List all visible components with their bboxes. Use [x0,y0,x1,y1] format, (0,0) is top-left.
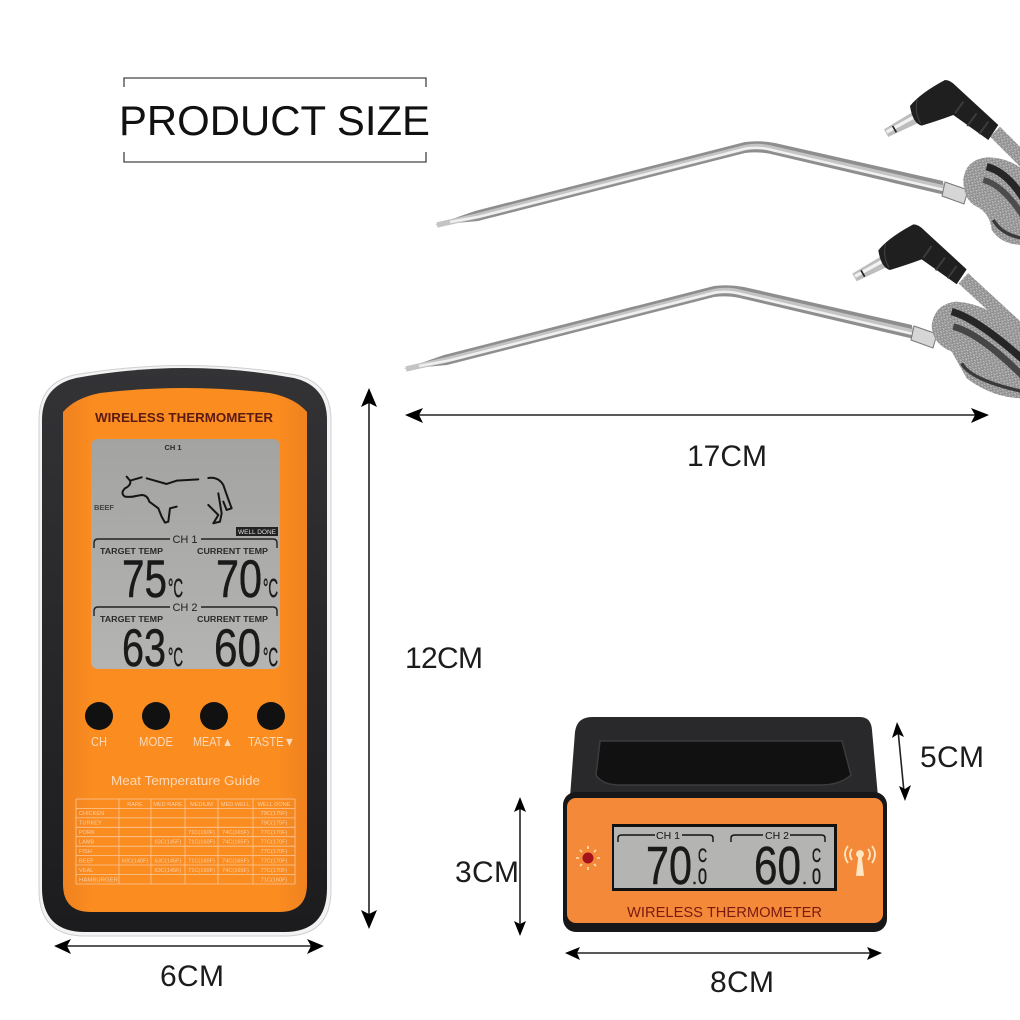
meat temperature table: 71C(160F) [188,830,215,836]
meat temperature table: 74C(165F) [222,830,249,836]
icon: red led [576,846,600,870]
button labels: MEAT▲ [193,735,233,749]
meat temperature table: MED RARE [153,802,183,808]
arrow: 12cm [361,388,377,929]
meat temperature table: 77C(170F) [261,830,287,836]
meat temperature table: 63C(145F) [155,840,181,846]
label: 3cm: 3CM [455,856,519,889]
channel 1 readout: °C [168,573,183,603]
channel 1 display: 70 [646,836,692,896]
probe 2 needle [404,285,937,369]
device body [42,368,327,932]
meat temperature table: PORK [79,830,95,836]
channel 1 readout: CURRENT TEMP [197,547,269,556]
channel 2 readout: CH 2 [172,602,198,614]
icon: jack 1 [884,80,998,140]
meat temperature table: 79C(175F) [261,820,287,826]
meat temperature table: 63C(145F) [155,868,181,874]
arrow: 3cm [514,797,526,936]
channel 1 display [618,830,713,896]
cable 2 lead [963,278,1020,337]
channel 1 readout: 70 [216,550,262,609]
channel 2 readout: TARGET TEMP [100,615,164,624]
channel 2 readout: °C [263,642,278,672]
channel 2 display [731,830,825,896]
meat temperature table: HAMBURGER [79,878,118,884]
arrow: 6cm [54,939,324,954]
meat temperature table: 77C(170F) [261,840,287,846]
channel 1 readout: CH 1 [172,534,198,546]
channel 2 readout: 60 [214,619,261,678]
label: 5cm: 5CM [920,741,984,774]
meat temperature table: 74C(165F) [222,858,249,864]
meat temperature table: 63C(145F) [155,858,181,864]
channel 2 display: 0 [812,864,821,889]
channel 1 readout: 75 [122,550,167,609]
channel 2 readout: CURRENT TEMP [197,615,269,624]
meat temperature table: MEDIUM [190,802,213,808]
channel 2 readout [94,602,278,678]
icon: jack 2 [852,224,967,284]
channel 1 readout: TARGET TEMP [100,547,164,556]
label: 8cm: 8CM [710,966,774,999]
icon: cow [122,477,232,523]
meat temperature table: 71C(160F) [261,878,287,884]
meat temperature table: 74C(165F) [222,868,249,874]
channel 2 readout: 63 [122,619,166,678]
meat temperature table: 71C(160F) [188,868,215,874]
meat temperature table: LAMB [79,840,95,846]
channel 2 readout: °C [168,642,183,672]
device heading: WIRELESS THERMOMETER [95,411,273,425]
cable coil 2 [932,302,1020,398]
meat temperature table: 77C(170F) [261,849,287,855]
channel 2 display: C [812,846,821,867]
channel 1 readout: °C [263,573,278,603]
channel 1 display: C [698,846,707,867]
lcd beef label: BEEF [94,503,114,512]
device outline [39,366,331,936]
channel 2 display: 60 [754,836,801,896]
meat temperature table: TURKEY [79,820,102,826]
button labels: TASTE▼ [248,735,295,749]
rear stand [570,717,878,797]
handheld receiver [39,366,331,936]
title: product size [119,78,430,162]
guide heading: Meat Temperature Guide [111,773,260,788]
stand slot [596,741,851,785]
icon: antenna signal [845,846,875,875]
probe 1 needle [435,141,968,225]
front heading: WIRELESS THERMOMETER [627,905,822,921]
orange front [567,798,883,923]
label: 6cm: 6CM [160,960,224,993]
probe cables and jacks [852,80,1020,398]
cable coil 1 [963,157,1020,245]
channel 1 display: CH 1 [656,830,680,842]
well done badge: WELL DONE [238,529,277,536]
meat temperature table: 77C(170F) [261,858,287,864]
meat temperature table: VEAL [79,868,93,874]
orange face [63,388,307,912]
meat temperature table: BEEF [79,858,94,864]
buttons [85,702,285,730]
button labels: MODE [139,735,173,749]
meat temperature table: 74C(165F) [222,840,249,846]
arrow: 17cm [405,408,989,423]
button labels: CH [91,735,107,749]
meat temperature table: 79C(175F) [261,811,287,817]
meat temperature table: RARE [127,802,143,808]
arrow: 8cm [565,947,882,960]
channel 1 readout [94,534,278,609]
meat temperature table: 60C(140F) [122,858,148,864]
meat temperature table: MED WELL [221,802,250,808]
lcd screen [91,439,280,669]
meat temperature table: WELL DONE [258,802,291,808]
channel 1 display: . [692,868,697,888]
button labels [91,735,295,749]
title: product size: PRODUCT SIZE [119,97,430,144]
meat temperature table [76,799,295,884]
meat temperature table: CHICKEN [79,811,104,817]
meat temperature table: 71C(160F) [188,858,215,864]
front body [563,792,887,932]
label: 12cm: 12CM [405,642,483,675]
front lcd [612,824,837,891]
channel 2 display: CH 2 [765,830,789,842]
meat temperature table: 77C(170F) [261,868,287,874]
desk display unit [563,717,887,932]
channel 2 display: . [802,868,807,888]
channel 1 display: 0 [698,864,707,889]
arrow: 5cm [892,722,911,801]
label: 17cm: 17CM [687,440,767,473]
lcd channel label: CH 1 [164,443,182,452]
meat temperature table: FISH [79,849,92,855]
cable 1 lead [995,132,1020,163]
meat temperature table: 71C(160F) [188,840,215,846]
